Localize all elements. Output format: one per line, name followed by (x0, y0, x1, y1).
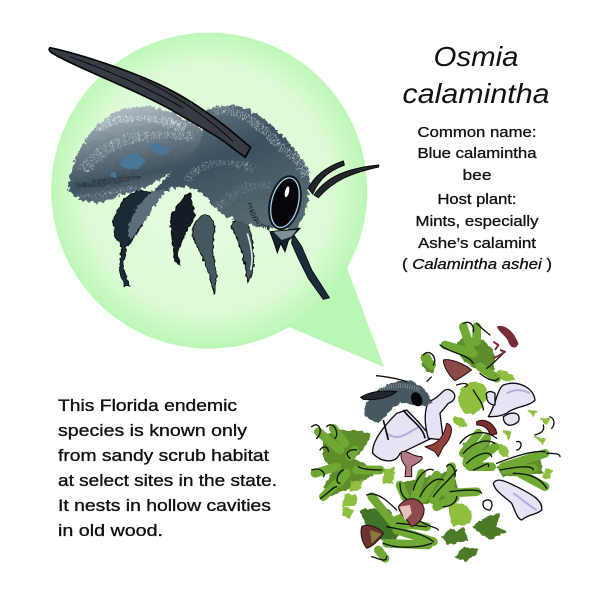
front leg (232, 220, 254, 282)
blue patches (111, 144, 168, 178)
hind legs (113, 187, 195, 286)
scientific name title: Osmia (434, 41, 518, 72)
description text block: It nests in hollow cavities (58, 496, 271, 515)
foliage washes (322, 337, 553, 562)
middle leg (192, 215, 217, 294)
speech bubble background (51, 33, 384, 367)
mouthparts (270, 228, 300, 253)
flowers (373, 383, 542, 520)
maroon buds and sepals (361, 326, 518, 548)
description text block: from sandy scrub habitat (58, 446, 269, 465)
host plant text (402, 192, 552, 273)
illustration: blue calamintha bee (49, 48, 379, 299)
host plant text: Ashe’s calamint (418, 236, 536, 252)
small bee on flower (361, 376, 432, 440)
host plant text: Host plant: (438, 192, 516, 208)
common name text: bee (462, 168, 492, 184)
wing (49, 48, 251, 157)
scientific name title: calamintha (402, 78, 550, 109)
thorax and head (155, 105, 309, 230)
description text block: in old wood. (58, 521, 163, 540)
antennae (308, 161, 379, 198)
common name text: Blue calamintha (418, 146, 538, 162)
rounded leaf fingers (315, 327, 545, 558)
compound eye (263, 172, 307, 234)
illustration: bee on calamint flowers (312, 322, 560, 562)
host plant text: Mints, especially (416, 214, 539, 230)
description text block: at select sites in the state. (58, 471, 277, 490)
host plant text: ( Calamintha ashei ) (402, 257, 552, 273)
common name text (418, 125, 538, 184)
description text block: species is known only (58, 421, 248, 440)
description text block (58, 396, 277, 540)
description text block: This Florida endemic (58, 396, 238, 415)
far front leg (292, 233, 329, 299)
leaf outlines (312, 322, 560, 560)
abdomen (68, 106, 213, 203)
scientific name title (402, 41, 550, 109)
common name text: Common name: (418, 125, 536, 141)
